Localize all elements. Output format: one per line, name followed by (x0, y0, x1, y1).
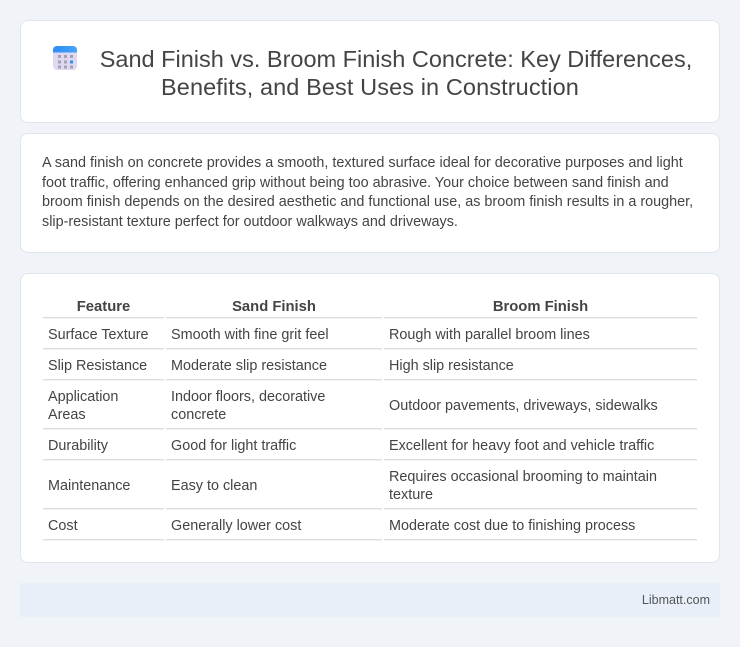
comparison table: Good for light traffic (171, 438, 296, 454)
intro card (20, 133, 720, 253)
comparison table: texture (389, 487, 433, 503)
title: Sand Finish vs. Broom Finish Concrete: Key Differences, (100, 46, 692, 72)
intro text: broom finish depends on the desired aesthetic and functional use, as broom finish results in a rougher, (42, 194, 693, 210)
header: Sand Finish: Sand Finish (232, 299, 316, 315)
comparison table: Smooth with fine grit feel (171, 327, 329, 343)
title (100, 46, 692, 100)
comparison table: Slip Resistance (48, 358, 147, 374)
header: Broom Finish: Broom Finish (493, 299, 588, 315)
intro text: A sand finish on concrete provides a smooth, textured surface ideal for decorative purposes and light (42, 155, 683, 171)
comparison table: Requires occasional brooming to maintain (389, 469, 657, 485)
title: Benefits, and Best Uses in Construction (161, 74, 579, 100)
comparison table: Easy to clean (171, 478, 257, 494)
comparison table: Indoor floors, decorative (171, 389, 325, 405)
comparison table: Rough with parallel broom lines (389, 327, 590, 343)
intro text: slip-resistant texture perfect for outdoor walkways and driveways. (42, 214, 458, 230)
comparison table: Excellent for heavy foot and vehicle traffic (389, 438, 654, 454)
comparison table (43, 299, 697, 541)
table card (20, 273, 720, 563)
comparison table: Surface Texture (48, 327, 149, 343)
comparison table: concrete (171, 407, 226, 423)
icon: calendar (53, 46, 77, 70)
header: Feature: Feature (77, 299, 130, 315)
comparison table: Application (48, 389, 118, 405)
comparison table: Outdoor pavements, driveways, sidewalks (389, 398, 658, 414)
comparison table: Maintenance (48, 478, 130, 494)
footer text: Libmatt.com (642, 593, 710, 607)
comparison table: Generally lower cost (171, 518, 301, 534)
comparison table: High slip resistance (389, 358, 514, 374)
intro text: foot traffic, offering enhanced grip without being too abrasive. Your choice between sand finish and (42, 175, 669, 191)
comparison table: Moderate cost due to finishing process (389, 518, 635, 534)
comparison table: Moderate slip resistance (171, 358, 327, 374)
intro text (42, 155, 693, 230)
comparison table: Durability (48, 438, 108, 454)
comparison table: Cost (48, 518, 78, 534)
footer bar (20, 583, 720, 617)
comparison table: Areas (48, 407, 86, 423)
header card (20, 20, 720, 123)
